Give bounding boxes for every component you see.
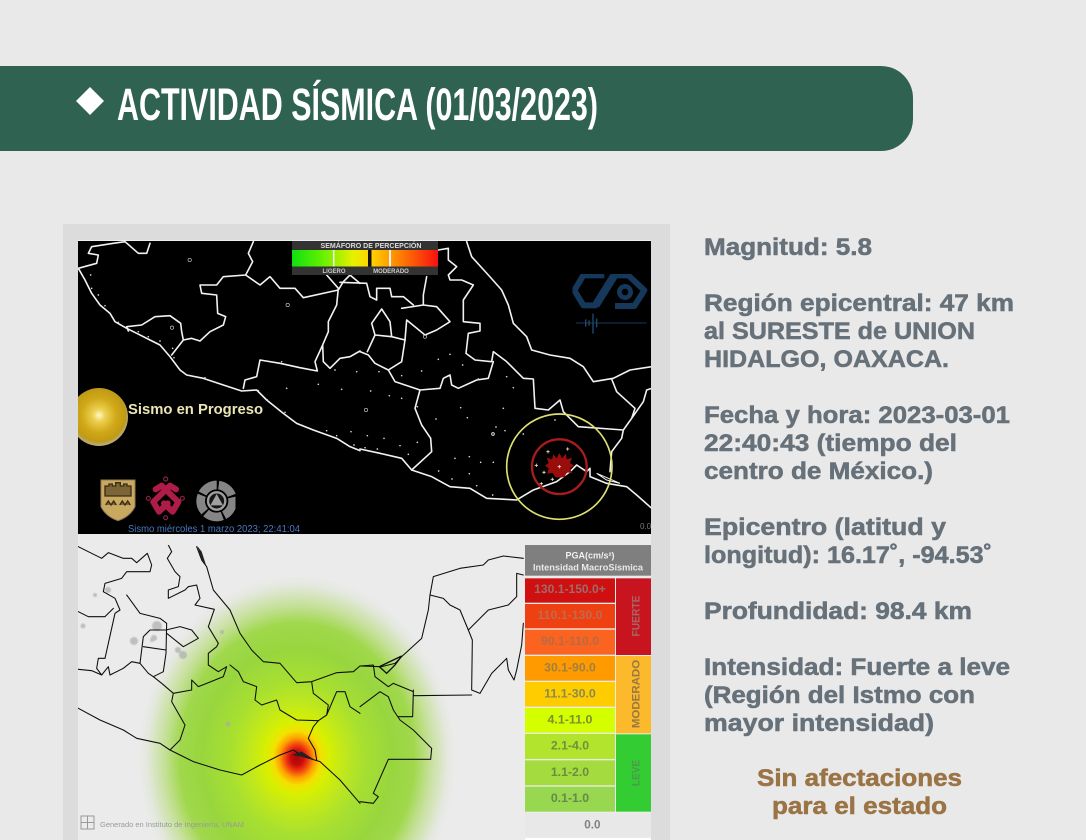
credit: UNAM: Generado en Instituto de Ingeniería, UNAM [100, 820, 244, 829]
date and time: centro de México.) [704, 458, 933, 485]
text block: earthquake details [704, 234, 1014, 820]
icon: CDMX shield [101, 480, 135, 521]
icon: civil protection emblem [201, 485, 233, 517]
intensity legend: 30.1-90.0 [544, 661, 596, 674]
intensity legend: 130.1-150.0+ [534, 583, 606, 596]
magnitude: Magnitud: 5.8 [704, 234, 872, 261]
note: no damage: para el estado [772, 793, 947, 820]
epicentral region [704, 290, 1014, 373]
intensity legend: 1.1-2.0 [551, 766, 589, 779]
perception traffic light [292, 241, 438, 275]
intensity legend: FUERTE [630, 595, 642, 636]
intensity: mayor intensidad) [704, 710, 934, 737]
intensity legend: 0.0 [584, 818, 600, 831]
intensity legend: Intensidad MacroSísmica [533, 563, 644, 573]
title banner [0, 66, 913, 151]
state borders east [340, 242, 652, 519]
intensity heat field [144, 582, 450, 840]
icon: diamond bullet [76, 87, 104, 115]
intensity: Intensidad: Fuerte a leve [704, 654, 1010, 681]
city spots [80, 587, 230, 726]
logo: CCA hexagons [574, 275, 647, 334]
intensity legend: LEVE [630, 760, 642, 786]
perception traffic light: SEMÁFORO DE PERCEPCIÓN [320, 241, 422, 250]
perception traffic light: LIGERO [322, 269, 346, 275]
date and time [704, 402, 1010, 485]
date and time: 22:40:43 (tiempo del [704, 430, 957, 457]
intensity legend: MODERADO [630, 660, 642, 728]
intensity legend [525, 545, 651, 840]
intensity legend: 11.1-30.0 [544, 687, 596, 700]
epicentral region: HIDALGO, OAXACA. [704, 346, 949, 373]
map: macroseismic intensity [78, 545, 525, 840]
borders west [78, 545, 360, 803]
intensity legend: 4.1-11.0 [547, 714, 592, 727]
intensity legend: PGA(cm/s²) [566, 550, 614, 560]
scale value: 0.0 [640, 522, 652, 531]
epicentral region: al SURESTE de UNION [704, 318, 975, 345]
icon: yellow sphere [78, 388, 128, 446]
perception traffic light: MODERADO [373, 269, 409, 275]
note: no damage: Sin afectaciones [757, 765, 962, 792]
intensity legend: 0.1-1.0 [551, 792, 589, 805]
intensity legend: 110.1-130.0 [537, 609, 602, 622]
intensity [704, 654, 1010, 737]
logos: government emblems [101, 477, 233, 521]
epicentral region: Región epicentral: 47 km [704, 290, 1014, 317]
intensity legend: 2.1-4.0 [551, 740, 589, 753]
state borders west [78, 242, 360, 451]
map: real-time seismic alert [70, 239, 652, 535]
icon: CDMX knot [146, 477, 184, 520]
epicentre rings [507, 414, 612, 519]
borders east [360, 556, 523, 803]
epicentre coordinates: Epicentro (latitud y [704, 514, 946, 541]
credit: UNAM [81, 816, 244, 829]
depth: Profundidad: 98.4 km [704, 598, 972, 625]
note: no damage [757, 765, 962, 820]
epicentre coordinates: longitud): 16.17˚, -94.53˚ [704, 542, 992, 569]
epicentre coordinates [704, 514, 992, 569]
timestamp: Sismo miércoles 1 marzo 2023; 22:41:04 [128, 524, 300, 535]
intensity legend: 90.1-110.0 [541, 635, 599, 648]
intensity: (Región del Istmo con [704, 682, 975, 709]
date and time: Fecha y hora: 2023-03-01 [704, 402, 1010, 429]
panel: maps [63, 224, 670, 840]
title: ACTIVIDAD SÍSMICA (01/03/2023) [117, 79, 598, 130]
status label: Sismo en Progreso [128, 402, 263, 418]
